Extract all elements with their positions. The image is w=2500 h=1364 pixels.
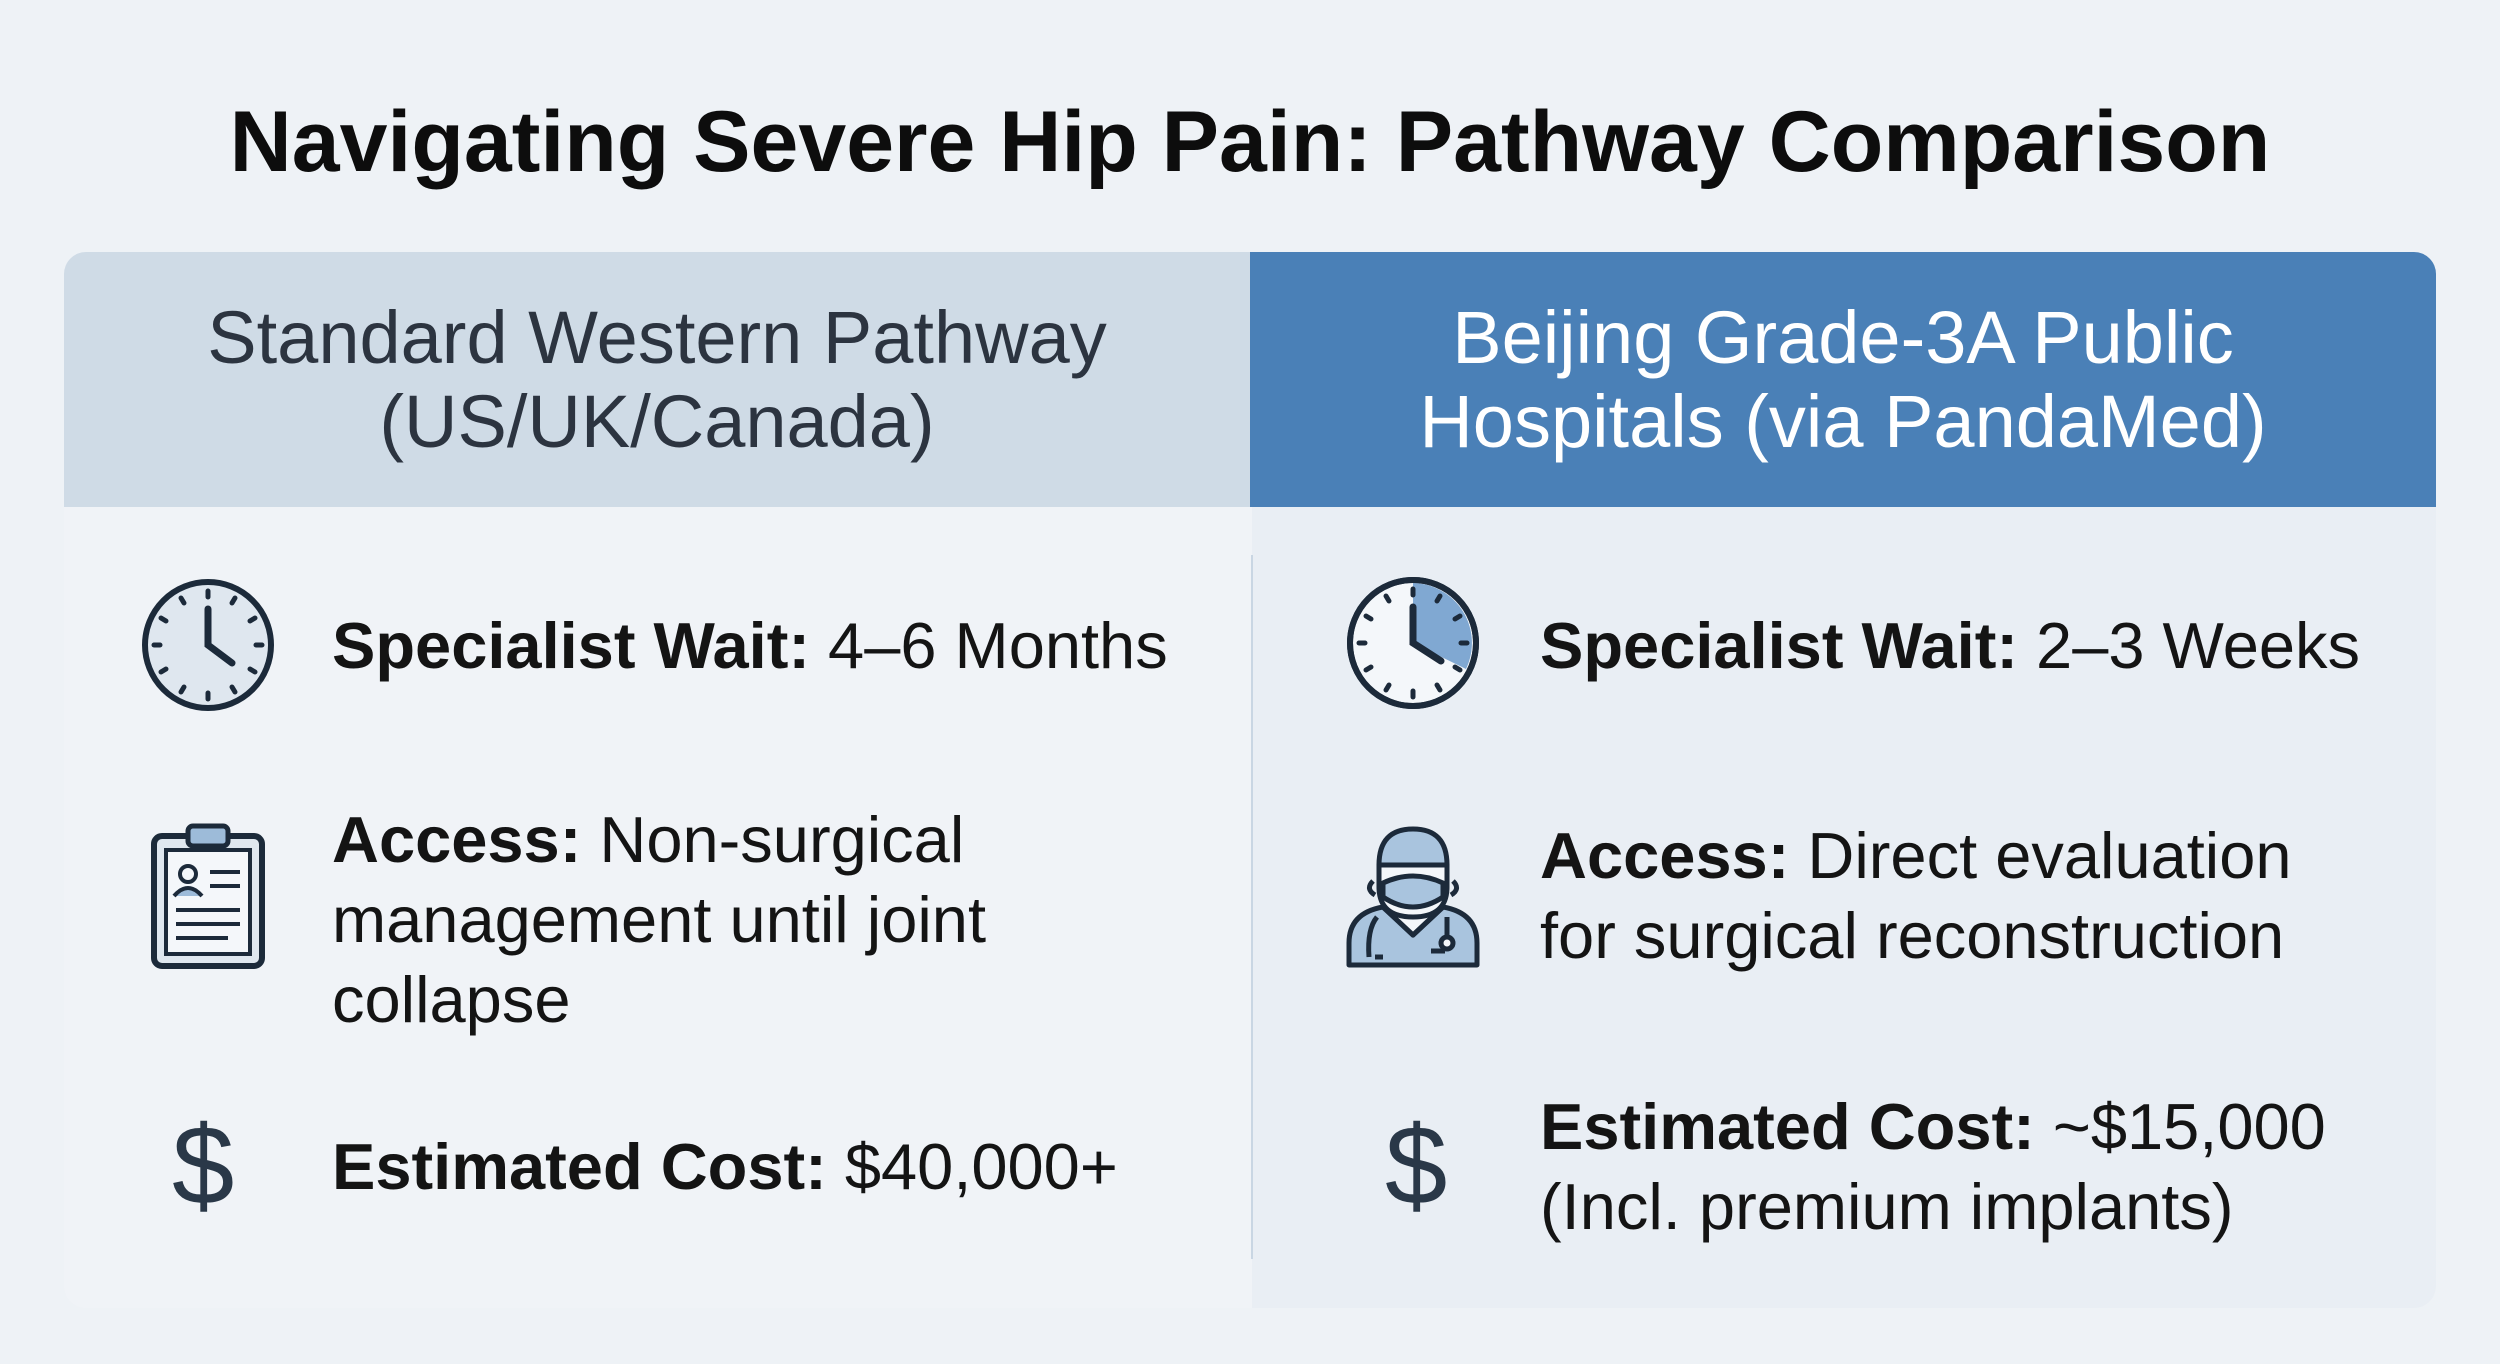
text: cost right (1540, 1090, 2326, 1243)
text: wait left: Specialist Wait: 4–6 Months (332, 609, 1168, 682)
heading: western: (US/UK/Canada) (379, 380, 935, 463)
text: access right (1540, 819, 2292, 972)
icon: dollar right: $ (1385, 1103, 1447, 1228)
heading: beijing: Hospitals (via PandaMed) (1419, 380, 2267, 463)
heading: beijing: Beijing Grade-3A Public (1452, 296, 2234, 379)
title: Navigating Severe Hip Pain: Pathway Comparison (230, 94, 2270, 190)
text: access right: for surgical reconstruction (1540, 899, 2284, 972)
right column background (1252, 507, 2436, 1308)
icon: clock left (142, 579, 274, 711)
text: access left: collapse (332, 963, 570, 1036)
header: western (64, 252, 1250, 507)
heading: western: Standard Western Pathway (207, 296, 1107, 379)
heading: beijing (1419, 296, 2267, 463)
text: wait right: Specialist Wait: 2–3 Weeks (1540, 609, 2360, 682)
divider (1251, 555, 1253, 1259)
icon: surgeon (1346, 826, 1480, 968)
icon: clipboard (151, 824, 265, 969)
text: cost right: Estimated Cost: ~$15,000 (1540, 1090, 2326, 1163)
text: access left (332, 803, 986, 1036)
text: access left: management until joint (332, 883, 986, 956)
panel: comparison card (64, 252, 2436, 1308)
text: cost left: Estimated Cost: $40,000+ (332, 1130, 1118, 1203)
text: access right: Access: Direct evaluation (1540, 819, 2292, 892)
icon: clock right (1347, 577, 1479, 709)
icon: dollar left: $ (172, 1103, 234, 1228)
header: beijing (1250, 252, 2436, 507)
heading: western (207, 296, 1107, 463)
text: cost right: (Incl. premium implants) (1540, 1170, 2233, 1243)
text: access left: Access: Non-surgical (332, 803, 964, 876)
